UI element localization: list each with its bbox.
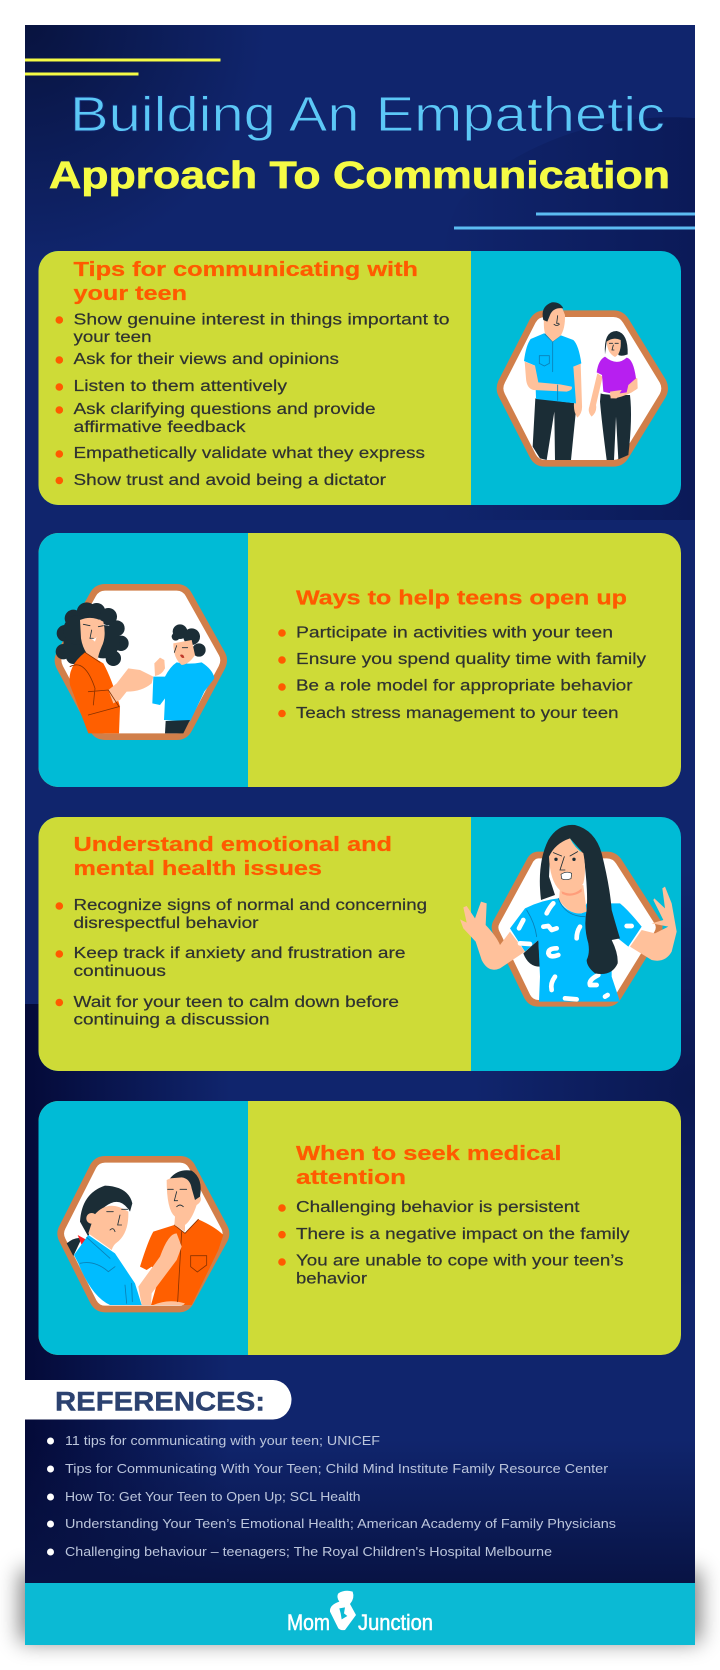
bullet list: medical attention: Challenging behavior is persistent (296, 1199, 580, 1216)
bullet list: tips: Empathetically validate what they express (74, 445, 425, 462)
panel: ways to help teens open up (38, 533, 681, 787)
decorative yellow lines (25, 58, 220, 76)
bullet list: medical attention: There is a negative impact on the family (296, 1226, 630, 1243)
bullet list: tips: affirmative feedback (74, 419, 246, 436)
bullet list: tips: your teen (74, 329, 152, 346)
title (49, 88, 670, 197)
bullet list: medical attention: You are unable to cope with your teen’s (296, 1252, 624, 1270)
bullet list: tips (56, 312, 450, 489)
references list: 11 tips for communicating with your teen; UNICEF (65, 1433, 380, 1448)
heading: medical attention: When to seek medical (296, 1142, 562, 1165)
bullet list: emotional health: Wait for your teen to calm down before (74, 994, 399, 1011)
references list: How To: Get Your Teen to Open Up; SCL Health (65, 1489, 360, 1504)
heading: emotional health: mental health issues (74, 857, 322, 880)
bullet list: medical attention (278, 1199, 630, 1288)
bullet list: tips: Show trust and avoid being a dictator (74, 472, 386, 489)
heading: emotional health: Understand emotional and (74, 833, 392, 856)
title: Approach To Communication (49, 155, 670, 197)
references heading pill (25, 1380, 292, 1420)
icon: frustrated teen (460, 825, 677, 1003)
heading: medical attention (296, 1142, 562, 1189)
heading: tips (74, 258, 418, 305)
heading: emotional health (74, 833, 392, 880)
bullet list: tips: Show genuine interest in things important to (74, 312, 450, 328)
bullet list: emotional health: Keep track if anxiety and frustration are (74, 945, 406, 962)
bullet list: emotional health: continuing a discussion (74, 1012, 270, 1029)
footer bar (25, 1583, 695, 1645)
icon: parent and teen standing (500, 302, 665, 463)
bullet list: tips: Ask clarifying questions and provide (74, 401, 376, 418)
heading: tips: Tips for communicating with (74, 258, 418, 281)
logo: MomJunction: Junction (358, 1610, 433, 1635)
heading: medical attention: attention (296, 1166, 406, 1189)
panel: tips for communicating (38, 251, 681, 505)
bullet list: ways: Participate in activities with your teen (296, 624, 613, 642)
panel: when to seek medical attention (38, 1101, 681, 1355)
panel: emotional and mental health (38, 817, 681, 1071)
heading: ways: Ways to help teens open up (296, 586, 627, 610)
icon: mother talking to teen (56, 587, 224, 737)
references list: Understanding Your Teen’s Emotional Health; American Academy of Family Physicians (65, 1516, 617, 1531)
logo: MomJunction: Mom (287, 1610, 330, 1635)
bullet list: emotional health: disrespectful behavior (74, 915, 258, 932)
bullet list: tips: Listen to them attentively (74, 378, 287, 395)
bullet list: ways: Ensure you spend quality time with family (296, 651, 646, 668)
decorative blue lines (454, 212, 695, 230)
logo: MomJunction (287, 1591, 433, 1635)
references list: Challenging behaviour – teenagers; The Royal Children's Hospital Melbourne (65, 1544, 552, 1559)
bullet list: tips: Ask for their views and opinions (74, 351, 339, 368)
bullet list: medical attention: behavior (296, 1271, 367, 1288)
bullet list: ways: Teach stress management to your teen (296, 705, 618, 722)
bullet list: emotional health: Recognize signs of normal and concerning (74, 897, 427, 914)
bullet list: ways: Be a role model for appropriate behavior (296, 678, 632, 695)
references list: Tips for Communicating With Your Teen; Child Mind Institute Family Resource Center (65, 1461, 609, 1476)
references heading pill: REFERENCES: (55, 1386, 265, 1416)
references list (47, 1433, 617, 1559)
bullet list: emotional health (56, 897, 427, 1029)
icon: worried parent and teen (61, 1159, 226, 1309)
bullet list: ways (278, 624, 646, 722)
bullet list: emotional health: continuous (74, 963, 166, 980)
title: Building An Empathetic (70, 88, 665, 142)
heading: tips: your teen (74, 282, 187, 305)
